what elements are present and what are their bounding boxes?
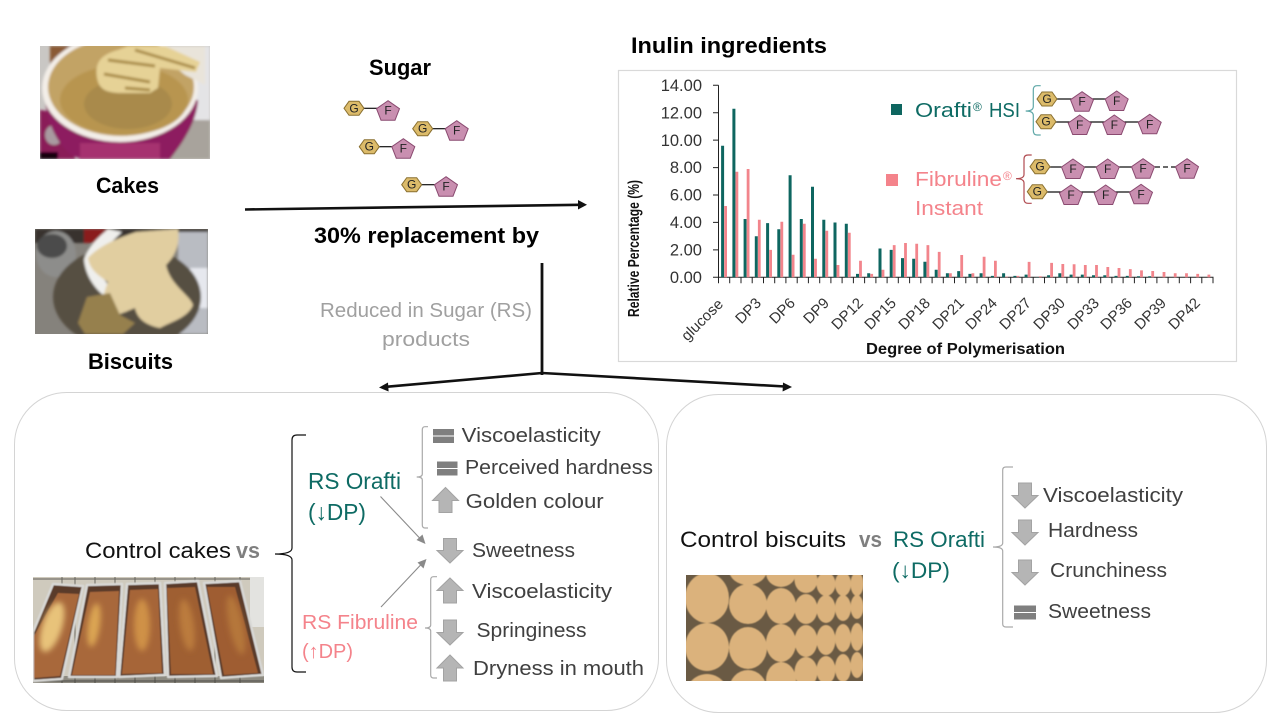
molecule row: short chain: F: [1113, 94, 1120, 108]
molecule: G-F 2: [413, 121, 468, 140]
legend: Fibruline Instant: [886, 155, 1198, 220]
x axis labels: DP24: [962, 295, 1001, 333]
y axis labels: 0.00: [670, 269, 702, 287]
legend: Fibruline Instant: ®: [1003, 169, 1012, 183]
item: Sweetness down: [437, 538, 575, 563]
molecule: G-F 1: G: [349, 101, 359, 115]
x axis labels: DP18: [895, 295, 934, 333]
y axis title: Relative Percentage (%): [626, 180, 643, 317]
text: Control biscuits vs: Control biscuits: [680, 527, 846, 552]
photo: cake batter in mixing bowl: [40, 34, 210, 159]
heading: Sugar: Sugar: [369, 55, 431, 80]
photo: baked biscuits on rack: [686, 575, 863, 681]
text: Control biscuits vs: vs: [859, 527, 882, 552]
molecule row: second chain: F: [1067, 188, 1075, 202]
pan 2: [69, 584, 122, 677]
x axis labels: DP27: [996, 295, 1035, 333]
y axis labels: [661, 77, 702, 287]
molecule row: longer chain: F: [1146, 117, 1153, 131]
pan 1: [33, 584, 83, 681]
y axis labels: 2.00: [670, 242, 702, 260]
x axis labels: DP42: [1165, 295, 1204, 333]
molecule row: long chain: G: [1035, 160, 1045, 174]
molecule row: long chain: F: [1069, 162, 1077, 176]
x axis labels: glucose: [678, 296, 727, 345]
item: Crunchiness down: Crunchiness: [1050, 560, 1167, 582]
y axis labels: 6.00: [670, 186, 702, 204]
arrows: split to cake and biscuit panels: [379, 263, 792, 392]
molecule row: long chain: F: [1139, 162, 1147, 176]
molecule row: second chain: G: [1033, 185, 1042, 199]
label: RS Orafti low DP: (↓DP): [892, 558, 950, 583]
legend: Fibruline Instant: Fibruline: [915, 169, 1002, 191]
legend: Fibruline Instant: Instant: [915, 198, 983, 220]
series: Orafti HSI bars: [723, 109, 1150, 277]
label: RS Orafti low DP: RS Orafti: [893, 527, 985, 552]
label: RS Orafti low DP: (↓DP): [308, 499, 366, 525]
molecule row: second chain: F: [1102, 188, 1109, 202]
molecule: G-F 1: [344, 101, 400, 120]
y axis labels: 14.00: [661, 77, 702, 95]
molecule row: long chain: F: [1183, 162, 1191, 176]
heading: Biscuits: Biscuits: [88, 349, 173, 374]
label: RS Fibruline high DP: (↑DP): [302, 641, 353, 663]
heading: Inulin ingredients: Inulin ingredients: [631, 33, 827, 58]
item: Crunchiness down: [1012, 560, 1167, 585]
label: Reduced in Sugar products: Reduced in Sugar (RS): [320, 300, 532, 322]
pan 5: [204, 581, 263, 678]
legend: Orafti HSI: ®: [973, 100, 982, 114]
y axis labels: 4.00: [670, 214, 702, 232]
x axis labels: DP3: [732, 295, 765, 327]
label: RS Fibruline high DP: [302, 612, 418, 663]
molecule: G-F 4: [402, 177, 458, 196]
panel: chart frame: [618, 70, 1236, 362]
item: Springiness down: [437, 620, 586, 645]
label: RS Orafti low DP: [308, 468, 401, 525]
y axis labels: 12.00: [661, 104, 702, 122]
item: Viscoelasticity up: [437, 578, 612, 603]
photo: baked loaf cakes: [33, 577, 264, 683]
x axis labels: DP21: [929, 295, 968, 333]
molecule row: second chain: [1027, 184, 1152, 204]
molecule: G-F 2: G: [418, 122, 427, 136]
item: Dryness in mouth up: [437, 655, 644, 681]
molecule: G-F 3: F: [400, 142, 407, 156]
molecule row: longer chain: G: [1041, 115, 1051, 129]
x axis labels: DP36: [1097, 295, 1136, 333]
label: RS Fibruline high DP: RS Fibruline: [302, 612, 418, 634]
y axis labels: 10.00: [661, 132, 702, 150]
x axis title: Degree of Polymerisation: [866, 341, 1065, 358]
item: Hardness down: [1012, 520, 1138, 545]
panel: cakes results: [14, 392, 658, 710]
item: Viscoelasticity down: [1012, 483, 1183, 508]
axes and ticks: [713, 85, 1214, 283]
x axis labels: DP12: [828, 295, 867, 333]
molecule: G-F 4: F: [442, 180, 450, 194]
legend: Orafti HSI: Orafti: [915, 100, 972, 122]
text: Control cakes vs: vs: [236, 538, 260, 563]
heading: Cakes: Cakes: [96, 173, 159, 198]
bracket: biscuit effects: [993, 467, 1013, 627]
label: RS Orafti low DP: [892, 527, 985, 583]
x axis labels: DP39: [1131, 295, 1170, 333]
item: Golden colour up: Golden colour: [466, 491, 604, 513]
molecule: G-F 3: G: [365, 140, 374, 154]
text: Control cakes vs: Control cakes: [85, 538, 231, 563]
panel: biscuits results: [666, 394, 1266, 720]
label: 30% replacement by: 30% replacement by: [314, 223, 540, 248]
item: Hardness down: Hardness: [1048, 520, 1138, 542]
bracket: Orafti effects: [417, 427, 428, 528]
sugar molecules: [344, 101, 468, 196]
x axis labels: DP33: [1064, 295, 1103, 333]
x axis labels: DP30: [1030, 295, 1069, 333]
molecule row: short chain: G: [1042, 92, 1052, 106]
brace: main: [275, 435, 306, 672]
bracket: Fibruline effects: [425, 577, 437, 678]
molecule: G-F 1: F: [384, 104, 392, 118]
pan 3: [119, 583, 165, 677]
item: Viscoelasticity equal: Viscoelasticity: [462, 425, 601, 447]
pan 4: [165, 581, 217, 677]
y axis labels: 8.00: [670, 159, 702, 177]
label: Reduced in Sugar products: [320, 300, 532, 351]
molecule: G-F 2: F: [453, 124, 460, 138]
label: RS Orafti low DP: RS Orafti: [308, 468, 401, 494]
legend: Orafti HSI: [891, 86, 1161, 135]
item: Dryness in mouth up: Dryness in mouth: [473, 658, 644, 680]
x axis labels: DP9: [800, 295, 833, 327]
bar chart: degree of polymerisation: [626, 77, 1214, 358]
molecule row: longer chain: F: [1076, 118, 1083, 132]
item: Sweetness equal: Sweetness: [1048, 601, 1151, 623]
molecule row: short chain: F: [1078, 95, 1086, 109]
item: Viscoelasticity up: Viscoelasticity: [472, 581, 612, 603]
molecule row: longer chain: F: [1111, 118, 1118, 132]
molecule: G-F 4: G: [407, 178, 416, 192]
arrow: Fibruline to sweetness: [381, 559, 426, 607]
x axis labels: [678, 295, 1204, 345]
item: Golden colour up: [432, 488, 604, 513]
arrow: Orafti to sweetness: [380, 496, 426, 544]
item: Viscoelasticity down: Viscoelasticity: [1043, 485, 1183, 507]
legend: Orafti HSI: HSI: [989, 100, 1020, 122]
item: Perceived hardness equal: Perceived hardness: [465, 457, 653, 479]
molecule row: long chain: F: [1104, 162, 1111, 176]
arrow: sugar to inulin: [245, 200, 587, 210]
photo: biscuit dough in bowl: [35, 229, 208, 334]
molecule row: short chain: [1037, 91, 1128, 111]
item: Sweetness down: Sweetness: [472, 540, 575, 562]
item: Springiness down: Springiness: [476, 620, 586, 642]
molecule: G-F 3: [359, 139, 415, 158]
molecule row: second chain: F: [1137, 187, 1145, 201]
x axis labels: DP15: [861, 295, 900, 333]
molecule row: longer chain: [1036, 114, 1161, 134]
label: Reduced in Sugar products: products: [382, 329, 470, 351]
x axis labels: DP6: [766, 295, 799, 327]
molecule row: long chain: [1030, 159, 1198, 178]
series: Fibruline Instant bars: [726, 169, 1209, 277]
